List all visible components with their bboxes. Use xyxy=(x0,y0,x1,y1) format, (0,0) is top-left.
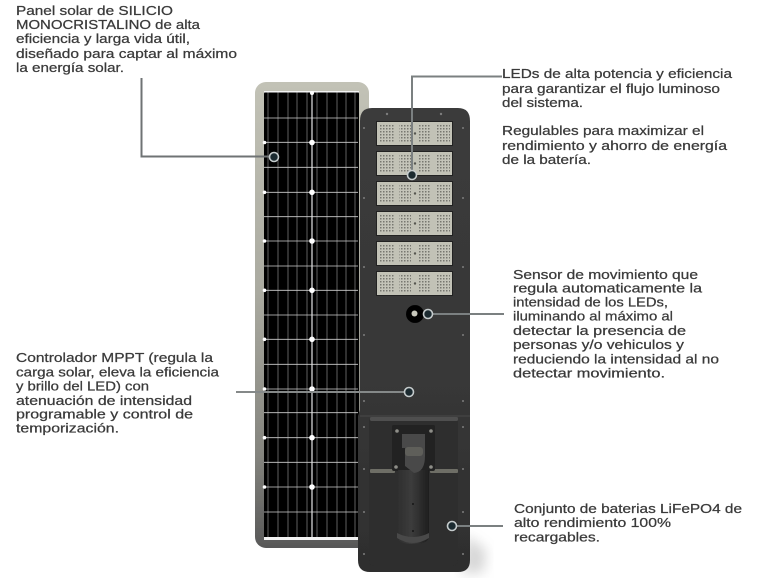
lamp shadow xyxy=(462,535,486,574)
lamp body xyxy=(358,108,470,572)
panel busbar xyxy=(311,92,313,540)
panel cells xyxy=(264,92,359,540)
motion sensor xyxy=(406,305,424,323)
text: solar panel: Panel solar de SILICIO xyxy=(16,3,173,18)
mount pole xyxy=(397,470,429,544)
text: batteries: alto rendimiento 100% xyxy=(514,515,672,530)
text: solar panel: diseñado para captar al máximo xyxy=(16,46,237,61)
text: MPPT controller: temporización. xyxy=(16,420,119,436)
panel vertical lines xyxy=(268,92,355,538)
panel top edge xyxy=(264,91,359,92)
mount plate xyxy=(392,425,435,471)
panel horizontal lines xyxy=(264,118,358,512)
cover top ridge xyxy=(370,417,458,421)
LED module 3 xyxy=(376,181,453,206)
text: solar panel: eficiencia y larga vida útil, xyxy=(16,31,190,46)
text: motion sensor: Sensor de movimiento que xyxy=(513,267,698,282)
text: MPPT controller: programable y control de xyxy=(16,406,193,422)
callout: battery connector xyxy=(448,522,503,530)
panel junction dots xyxy=(263,91,315,490)
LED module 1 xyxy=(376,121,453,146)
text: LEDs: Regulables para maximizar el xyxy=(502,123,704,138)
housing seam xyxy=(360,415,470,417)
LED module 6 xyxy=(376,271,453,296)
panel bottom edge xyxy=(264,537,359,540)
text: motion sensor: reduciendo la intensidad al no xyxy=(513,351,719,366)
text: motion sensor: detectar movimiento. xyxy=(513,365,665,380)
callout: solar panel connector xyxy=(142,78,278,162)
text: motion sensor: intensidad de los LEDs, xyxy=(513,295,668,310)
text: LEDs: para garantizar el flujo luminoso xyxy=(502,81,720,96)
pole holes xyxy=(412,503,414,532)
battery cover xyxy=(369,417,458,566)
callout: LED connector xyxy=(408,76,502,180)
text: solar panel: la energía solar. xyxy=(16,60,124,75)
cover ledge left xyxy=(370,469,395,473)
mount arm xyxy=(402,434,425,473)
text: LEDs: del sistema. xyxy=(502,95,583,110)
LED module 5 xyxy=(376,241,453,266)
text: solar panel xyxy=(16,3,237,75)
text: motion sensor: detectar la presencia de xyxy=(513,323,686,338)
LED module 2 xyxy=(376,151,453,176)
arm highlight xyxy=(405,447,423,456)
panel frame xyxy=(255,82,369,548)
callout: sensor connector xyxy=(424,310,504,318)
callout: controller connector xyxy=(236,388,414,396)
text: MPPT controller: atenuación de intensidad xyxy=(16,393,192,408)
text: motion sensor xyxy=(513,267,719,380)
solar panel xyxy=(255,82,369,548)
text: LEDs xyxy=(502,66,733,167)
lamp housing xyxy=(358,108,470,572)
mount screws xyxy=(394,429,433,469)
cover ledge right xyxy=(430,469,458,473)
pole cap xyxy=(397,533,429,543)
text: MPPT controller: carga solar, eleva la eficiencia xyxy=(16,365,220,380)
text: solar panel: MONOCRISTALINO de alta xyxy=(16,17,201,32)
text: motion sensor: regula automaticamente la xyxy=(513,280,703,296)
text: LEDs: rendimiento y ahorro de energía xyxy=(502,138,728,153)
text: MPPT controller: Controlador MPPT (regula la xyxy=(16,350,214,365)
text: MPPT controller xyxy=(16,350,220,436)
text: batteries: Conjunto de baterias LiFePO4 de xyxy=(514,501,742,516)
text: LEDs: LEDs de alta potencia y eficiencia xyxy=(502,66,733,81)
text: motion sensor: iluminando al máximo al xyxy=(513,309,673,324)
housing screws xyxy=(363,113,464,555)
text: LEDs: de la batería. xyxy=(502,152,591,167)
LED module 4 xyxy=(376,211,453,236)
text: batteries: recargables. xyxy=(514,530,600,545)
text: motion sensor: personas y/o vehiculos y xyxy=(513,337,685,352)
text: batteries xyxy=(514,501,742,545)
text: MPPT controller: y brillo del LED) con xyxy=(16,379,149,394)
